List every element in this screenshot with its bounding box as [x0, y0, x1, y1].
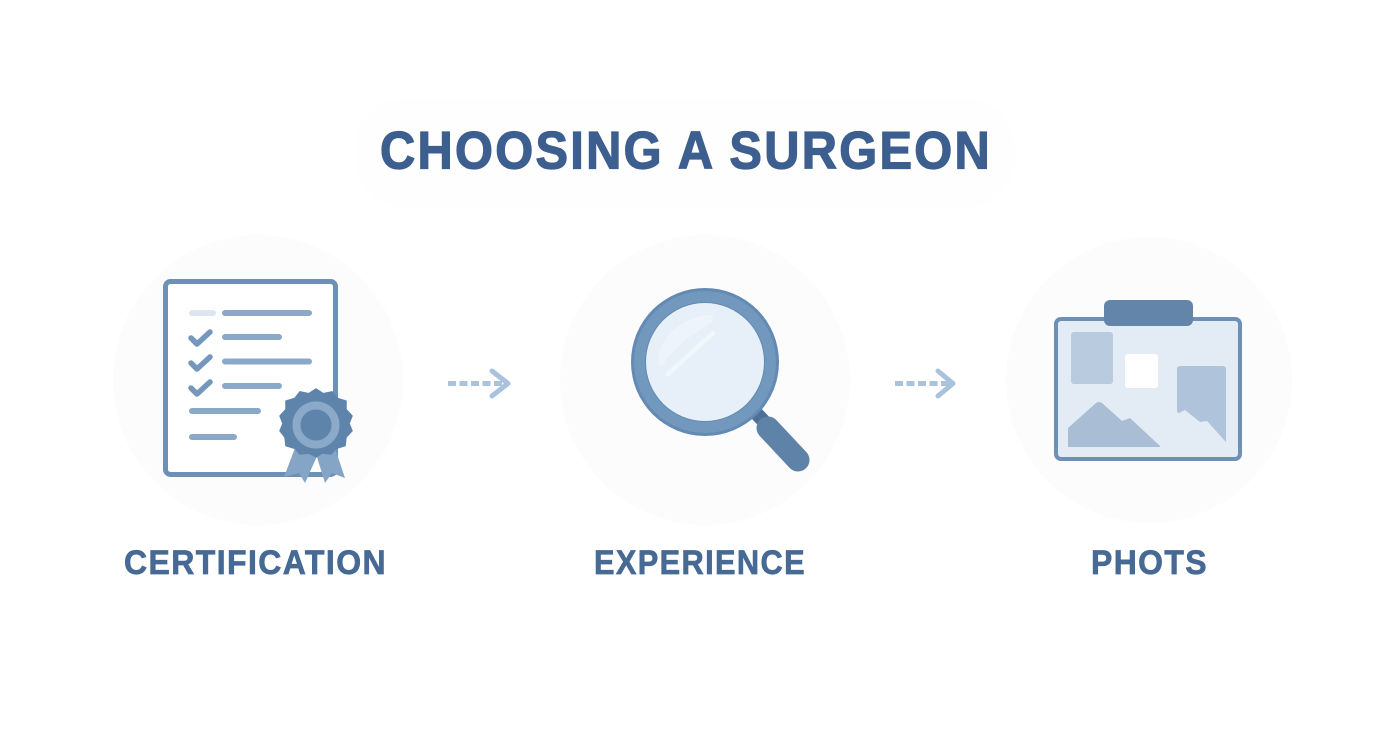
- icon backdrop: photos: [1006, 237, 1292, 523]
- arrow: experience to photos: [895, 371, 953, 396]
- panel: experience: [560, 235, 850, 582]
- panel: photos: [1006, 237, 1292, 582]
- icon: photo board: [1056, 300, 1240, 459]
- icon: ribbon seal: [280, 389, 352, 483]
- icon: certificate document: [166, 282, 352, 483]
- label: experience: EXPERIENCE: [594, 544, 806, 582]
- panel: certification: [113, 235, 403, 582]
- arrow: certification to experience: [448, 371, 508, 396]
- label: certification: CERTIFICATION: [124, 544, 387, 582]
- icon backdrop: experience: [560, 235, 850, 525]
- label: photos: PHOTS: [1091, 544, 1208, 582]
- title: [355, 98, 1015, 208]
- title: CHOOSING A SURGEON: [380, 122, 992, 180]
- icon backdrop: certification: [113, 235, 403, 525]
- icon: magnifying glass: [631, 288, 798, 460]
